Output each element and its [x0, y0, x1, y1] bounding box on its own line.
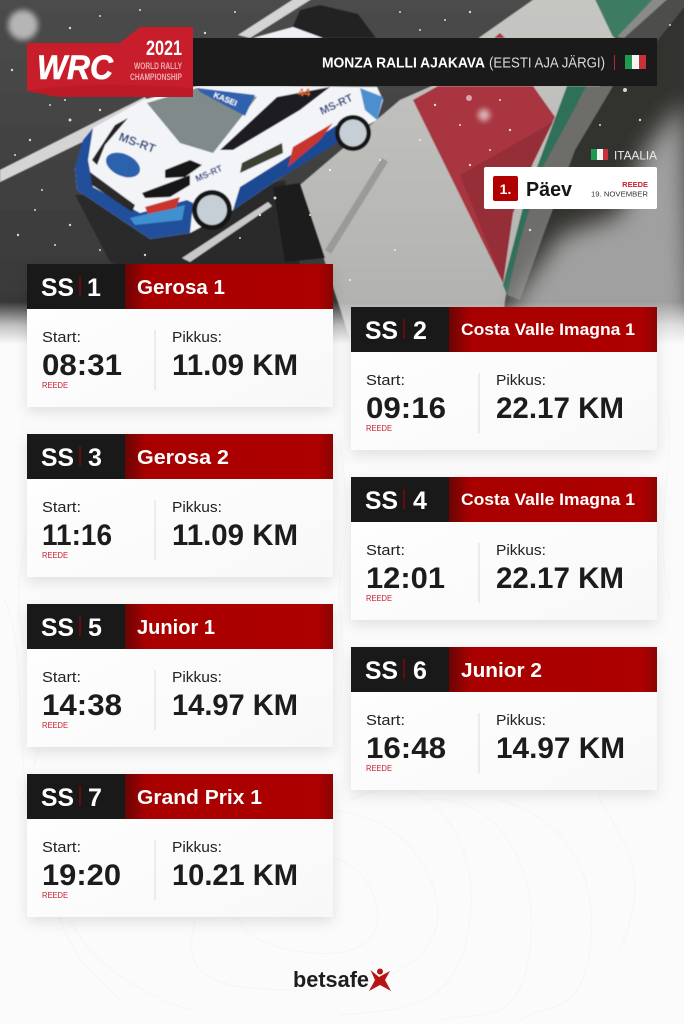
card: SS 2: 2 [413, 317, 427, 345]
windscreen [147, 88, 257, 153]
card: SS 6: REEDE [366, 764, 392, 773]
fog [505, 100, 684, 360]
icon: italian flag [625, 55, 646, 69]
card: SS 7: Start: [42, 840, 81, 856]
card: SS 4 [351, 477, 657, 620]
card: SS 4: 22.17 KM [496, 562, 624, 595]
header bar [193, 38, 657, 86]
day badge: 1. [500, 181, 511, 197]
day badge: Päev [526, 179, 573, 201]
card: SS 2: 22.17 KM [496, 392, 624, 425]
card: SS 5: 5 [88, 614, 102, 642]
country label [591, 149, 657, 162]
card: SS 3: REEDE [42, 551, 68, 560]
card: SS 6 [351, 647, 657, 790]
card: SS 5: 14:38 [42, 689, 122, 722]
card: SS 7 [27, 774, 333, 917]
fade to white [0, 302, 684, 344]
card: SS 4: 4 [413, 487, 427, 515]
card: SS 4: Pikkus: [496, 543, 546, 559]
card: SS 7: Pikkus: [172, 840, 222, 856]
day badge: REEDE [622, 180, 648, 189]
card: SS 7: REEDE [42, 891, 68, 900]
card: SS 2: Pikkus: [496, 373, 546, 389]
car spoiler [293, 5, 376, 38]
card: SS 7: 7 [88, 784, 102, 812]
WRC logo badge: CHAMPIONSHIP [130, 72, 182, 82]
card: SS 4: Start: [366, 543, 405, 559]
red decal [288, 123, 333, 167]
card: SS 7: Grand Prix 1 [137, 786, 262, 809]
card: SS 2: 09:16 [366, 392, 446, 425]
rear quarter [360, 88, 383, 120]
card: SS 1: Pikkus: [172, 330, 222, 346]
WRC logo badge: 2021 [146, 37, 182, 60]
rough ground right [530, 8, 684, 276]
card: SS 2 [351, 307, 657, 450]
card: SS 5: Start: [42, 670, 81, 686]
card: SS 3: 11.09 KM [172, 519, 298, 552]
card: SS 6: 6 [413, 657, 427, 685]
card: SS 5: Pikkus: [172, 670, 222, 686]
WRC logo badge: WORLD RALLY [134, 61, 182, 71]
card: SS 6: 14.97 KM [496, 732, 625, 765]
header subtitle: (EESTI AJA JÄRGI) [489, 54, 605, 72]
green kerb paint [503, 86, 587, 295]
WRC logo badge [27, 27, 193, 97]
betsafe logo: betsafe [293, 967, 369, 992]
ford badge [105, 152, 141, 178]
rear wheel [335, 115, 371, 151]
car body [75, 86, 383, 239]
card: SS 3: Gerosa 2 [137, 446, 229, 469]
card: SS 5: REEDE [42, 721, 68, 730]
card: SS 4: Costa Valle Imagna 1 [461, 490, 635, 509]
card: SS 1: REEDE [42, 381, 68, 390]
card: SS 6: Start: [366, 713, 405, 729]
card: SS 1 [27, 264, 333, 407]
car shadow [76, 180, 300, 264]
headlamps [142, 175, 190, 198]
card: SS 4: SS [365, 487, 398, 515]
WRC logo badge: WRC [37, 49, 113, 87]
card: SS 1: 1 [87, 274, 101, 302]
card: SS 5: SS [41, 614, 74, 642]
hero photo: rally car on snowy track [0, 0, 684, 360]
card: SS 5: 14.97 KM [172, 689, 298, 722]
header title: MONZA RALLI AJAKAVA [322, 56, 486, 72]
card: SS 3: SS [41, 444, 74, 472]
background contour lines [5, 400, 670, 1020]
white track lines [0, 97, 152, 182]
card: SS 6: Junior 2 [461, 659, 542, 682]
card: SS 3: 11:16 [42, 519, 112, 552]
card: SS 1: 08:31 [42, 349, 122, 382]
side windows [220, 87, 330, 150]
card: SS 4: REEDE [366, 594, 392, 603]
card: SS 3: Pikkus: [172, 500, 222, 516]
tyre streak [328, 160, 385, 252]
card: SS 2: Start: [366, 373, 405, 389]
card: SS 4: 12:01 [366, 562, 445, 595]
card: SS 2: SS [365, 317, 398, 345]
card: SS 7: 10.21 KM [172, 859, 298, 892]
door decal [240, 143, 283, 173]
card: SS 6: SS [365, 657, 398, 685]
grille [90, 172, 135, 212]
snow flakes [8, 9, 671, 281]
card: SS 7: 19:20 [42, 859, 121, 892]
card: SS 3: 3 [88, 444, 102, 472]
card: SS 1: SS [41, 274, 74, 302]
card: SS 2: REEDE [366, 424, 392, 433]
card: SS 3: Start: [42, 500, 81, 516]
concrete apron [300, 0, 615, 345]
front corner blue [75, 128, 193, 239]
hero photo: rally car on snowy track: 44 [298, 87, 311, 99]
grey curb [507, 86, 613, 300]
card: SS 7: SS [41, 784, 74, 812]
red kerb paint [413, 86, 555, 283]
hero photo: rally car on snowy track: KASEI [212, 91, 238, 108]
card: SS 6: Pikkus: [496, 713, 546, 729]
hero photo: rally car on snowy track: MS-RT [318, 92, 355, 118]
day badge [484, 167, 657, 209]
front wheel [192, 190, 232, 230]
card: SS 1: Start: [42, 330, 81, 346]
country label: ITAALIA [614, 150, 657, 162]
card: SS 2: Costa Valle Imagna 1 [461, 320, 635, 339]
card: SS 5: Junior 1 [137, 616, 215, 639]
hero photo: rally car on snowy track: MS-RT [194, 163, 224, 184]
day badge: 19. NOVEMBER [591, 190, 649, 198]
card: SS 6: 16:48 [366, 732, 446, 765]
card: SS 1: Gerosa 1 [137, 276, 225, 299]
card: SS 3 [27, 434, 333, 577]
sill blue [233, 123, 340, 210]
card: SS 5 [27, 604, 333, 747]
header divider [614, 55, 615, 70]
card: SS 1: 11.09 KM [172, 349, 298, 382]
asphalt [0, 0, 616, 342]
sponsor labels: MS-RT [117, 130, 158, 156]
